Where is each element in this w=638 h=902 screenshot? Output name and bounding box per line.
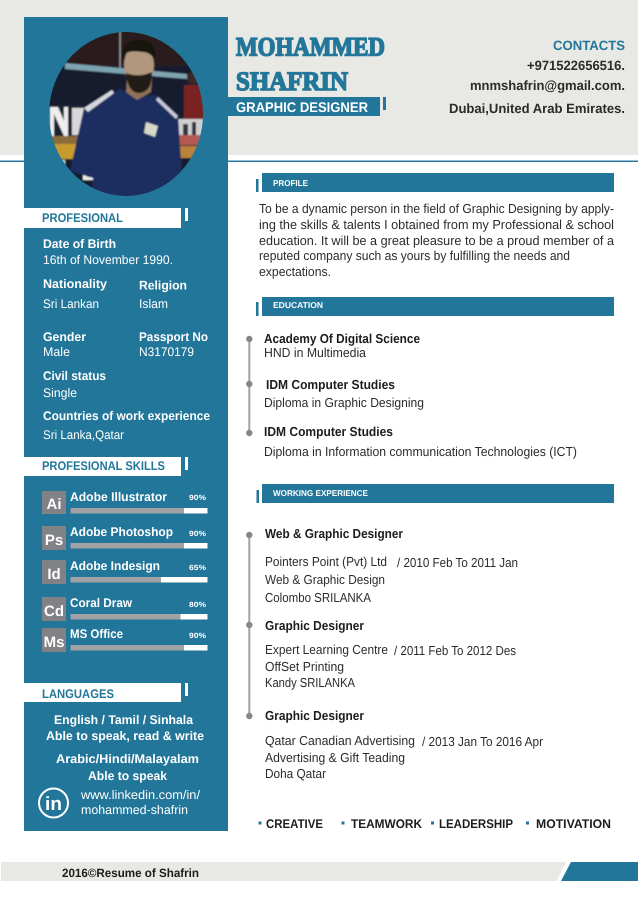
experience entries: Kandy SRILANKA — [265, 675, 355, 690]
experience entries: Web & Graphic Design — [265, 572, 385, 587]
skill: adobe illustrator — [42, 490, 208, 514]
heading: education — [256, 297, 614, 316]
footer band: 2016©Resume of Shafrin — [62, 866, 199, 880]
personal details: Male — [43, 345, 70, 359]
skill: adobe indesign: 65% — [189, 563, 206, 572]
job title bar: GRAPHIC DESIGNER — [236, 99, 368, 115]
experience entries: Advertising & Gift Teading — [265, 750, 405, 765]
personal details — [43, 237, 210, 442]
linkedin url — [80, 788, 201, 817]
languages text: English / Tamil / Sinhala — [54, 713, 194, 727]
profile text: education. It will be a great pleasure to be a proud member of a — [259, 233, 615, 248]
experience entries: Pointers Point (Pvt) Ltd — [265, 554, 387, 569]
heading: profile: PROFILE — [273, 178, 308, 188]
skill: adobe illustrator: Ai — [46, 496, 62, 513]
header band — [0, 0, 638, 155]
education entries: Diploma in Graphic Designing — [264, 395, 424, 410]
heading: profesional — [24, 208, 188, 228]
personal details: Countries of work experience — [43, 409, 210, 423]
heading: profile — [256, 173, 614, 192]
experience entries: Expert Learning Centre — [265, 642, 388, 657]
personal details: Date of Birth — [43, 237, 116, 251]
name title: MOHAMMED — [236, 32, 385, 62]
languages text: Able to speak, read & write — [46, 729, 204, 743]
heading: profesional skills — [24, 457, 188, 476]
header rule — [0, 160, 638, 162]
contacts: CONTACTS — [553, 38, 625, 53]
personal details: Sri Lanka,Qatar — [43, 428, 124, 442]
contacts: +971522656516. — [527, 58, 625, 73]
soft skills row: LEADERSHIP — [439, 817, 513, 831]
education entries — [264, 331, 577, 459]
experience entries: Graphic Designer — [265, 618, 364, 633]
personal details: 16th of November 1990. — [43, 253, 173, 267]
linkedin url: www.linkedin.com/in/ — [80, 788, 201, 802]
skill: adobe photoshop: Adobe Photoshop — [70, 525, 173, 539]
contacts: mnmshafrin@gmail.com. — [470, 78, 625, 93]
personal details: Religion — [139, 278, 187, 292]
heading: profesional: PROFESIONAL — [42, 211, 123, 225]
soft skills row: MOTIVATION — [536, 817, 611, 831]
personal details: Passport No — [139, 330, 208, 344]
contacts — [449, 38, 625, 116]
skill: adobe indesign: Adobe Indesign — [70, 559, 160, 573]
icon: linkedin: in — [45, 794, 62, 815]
personal details: Civil status — [43, 369, 106, 383]
skill: adobe illustrator: 90% — [189, 493, 206, 502]
experience entries: OffSet Printing — [265, 659, 344, 674]
education timeline — [246, 336, 252, 436]
profile text: expectations. — [259, 264, 331, 279]
education entries: Diploma in Information communication Technologies (ICT) — [264, 444, 577, 459]
footer band — [1, 862, 638, 881]
skill: adobe photoshop — [42, 525, 208, 550]
experience entries: / 2013 Jan To 2016 Apr — [422, 734, 544, 749]
heading: working experience — [256, 484, 614, 503]
languages text — [46, 713, 204, 783]
skill: adobe photoshop: 90% — [189, 529, 206, 538]
education entries: IDM Computer Studies — [264, 424, 393, 439]
sidebar panel — [24, 17, 228, 831]
skill: coral draw: Coral Draw — [70, 596, 132, 610]
heading: working experience: WORKING EXPERIENCE — [273, 488, 368, 498]
profile text: reputed company such as yours by fulfilling the needs and — [259, 248, 570, 263]
soft skills row — [258, 817, 611, 831]
name title — [236, 32, 385, 96]
experience entries: Web & Graphic Designer — [265, 526, 403, 541]
contacts: Dubai,United Arab Emirates. — [449, 101, 625, 116]
skill: ms office: MS Office — [70, 627, 123, 641]
profile photo — [45, 28, 207, 200]
skill: ms office: Ms — [44, 634, 64, 651]
heading: languages: LANGUAGES — [42, 687, 114, 701]
skill: coral draw: 80% — [189, 600, 206, 609]
personal details: Nationality — [43, 277, 107, 291]
name title: SHAFRIN — [236, 66, 348, 96]
personal details: Islam — [139, 297, 168, 311]
heading: education: EDUCATION — [273, 300, 323, 310]
experience entries: Colombo SRILANKA — [265, 590, 371, 605]
skill: coral draw — [42, 596, 208, 621]
experience entries: / 2011 Feb To 2012 Des — [394, 643, 516, 658]
skill: adobe illustrator: Adobe Illustrator — [70, 490, 167, 504]
education entries: IDM Computer Studies — [266, 377, 395, 392]
skill: ms office: 90% — [189, 631, 206, 640]
profile text — [259, 201, 615, 279]
personal details: N3170179 — [139, 345, 194, 359]
experience entries — [265, 526, 544, 781]
personal details: Gender — [43, 330, 86, 344]
personal details: Sri Lankan — [43, 297, 99, 311]
education entries: Academy Of Digital Science — [264, 331, 420, 346]
experience entries: / 2010 Feb To 2011 Jan — [397, 555, 518, 570]
experience timeline — [246, 532, 252, 719]
profile text: To be a dynamic person in the field of Graphic Designing by apply- — [259, 201, 614, 216]
soft skills row: TEAMWORK — [351, 817, 422, 831]
heading: languages — [24, 683, 188, 702]
languages text: Able to speak — [88, 769, 167, 783]
skill: ms office — [42, 627, 208, 652]
experience entries: Doha Qatar — [265, 766, 327, 781]
profile text: ing the skills & talents I obtained from my Professional & school — [259, 217, 614, 232]
education entries: HND in Multimedia — [264, 345, 367, 360]
skill: adobe indesign — [42, 559, 208, 584]
soft skills row: CREATIVE — [266, 817, 323, 831]
languages text: Arabic/Hindi/Malayalam — [56, 752, 199, 766]
heading: profesional skills: PROFESIONAL SKILLS — [42, 459, 165, 473]
personal details: Single — [43, 386, 77, 400]
experience entries: Graphic Designer — [265, 708, 364, 723]
skill: adobe indesign: Id — [47, 566, 61, 583]
skill: adobe photoshop: Ps — [45, 532, 63, 549]
icon: linkedin — [39, 788, 68, 818]
experience entries: Qatar Canadian Advertising — [265, 733, 415, 748]
skill: coral draw: Cd — [44, 603, 64, 620]
linkedin url: mohammed-shafrin — [81, 803, 188, 817]
